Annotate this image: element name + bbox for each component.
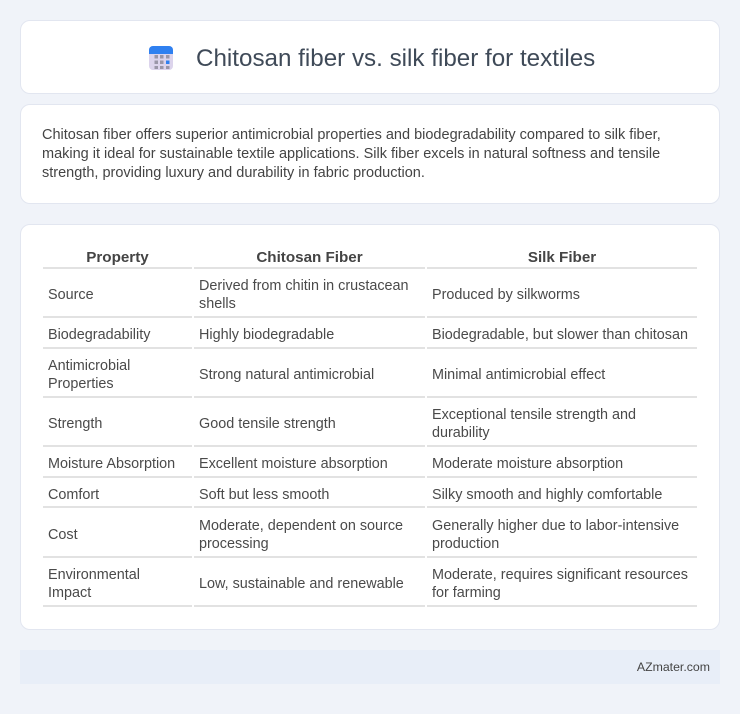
header: Chitosan Fiber: Chitosan Fiber — [256, 249, 363, 266]
comparison table: Good tensile strength — [199, 416, 336, 432]
comparison table: for farming — [432, 585, 501, 601]
row: Environmental Impact — [48, 567, 140, 601]
comparison table: Exceptional tensile strength and — [432, 407, 636, 423]
summary text: strength, providing luxury and durability in fabric production. — [42, 165, 425, 181]
footer credit: AZmater.com — [637, 660, 710, 674]
comparison table: Excellent moisture absorption — [199, 456, 388, 472]
table card — [20, 224, 720, 630]
comparison table: Produced by silkworms — [432, 287, 580, 303]
summary text: making it ideal for sustainable textile applications. Silk fiber excels in natural softness and tensile — [42, 146, 660, 162]
row: Strength: Strength — [48, 416, 102, 432]
comparison table: Moderate moisture absorption — [432, 456, 623, 472]
comparison table: Soft but less smooth — [199, 487, 329, 503]
summary text — [42, 127, 661, 181]
header: Silk Fiber: Silk Fiber — [528, 249, 596, 266]
comparison table: Moderate, dependent on source — [199, 518, 403, 534]
row: Environmental Impact: Impact — [48, 585, 91, 601]
header: Property: Property — [86, 249, 149, 266]
row: Cost: Cost — [48, 527, 78, 543]
comparison table: production — [432, 536, 499, 552]
comparison table: Minimal antimicrobial effect — [432, 367, 605, 383]
comparison table: Biodegradable, but slower than chitosan — [432, 327, 688, 343]
icon: calendar — [149, 46, 173, 70]
row: Moisture Absorption: Moisture Absorption — [48, 456, 175, 472]
row: Biodegradability: Biodegradability — [48, 327, 150, 343]
summary text: Chitosan fiber offers superior antimicrobial properties and biodegradability compared to silk fiber, — [42, 127, 661, 143]
row: Antimicrobial Properties: Properties — [48, 376, 114, 392]
comparison table: Moderate, requires significant resources — [432, 567, 688, 583]
comparison table: shells — [199, 296, 236, 312]
row: Environmental Impact: Environmental — [48, 567, 140, 583]
comparison table: durability — [432, 425, 490, 441]
title: Chitosan fiber vs. silk fiber for textiles — [196, 45, 595, 72]
comparison table: processing — [199, 536, 269, 552]
title card — [20, 20, 720, 94]
footer bar — [20, 650, 720, 684]
row: Source: Source — [48, 287, 94, 303]
comparison table: Strong natural antimicrobial — [199, 367, 374, 383]
comparison table: Generally higher due to labor-intensive — [432, 518, 679, 534]
summary card — [20, 104, 720, 204]
comparison table: Highly biodegradable — [199, 327, 334, 343]
comparison table: Derived from chitin in crustacean — [199, 278, 409, 294]
row: Comfort: Comfort — [48, 487, 99, 503]
comparison table: Low, sustainable and renewable — [199, 576, 404, 592]
row: Antimicrobial Properties: Antimicrobial — [48, 358, 130, 374]
row: Antimicrobial Properties — [48, 358, 130, 392]
comparison table: Silky smooth and highly comfortable — [432, 487, 662, 503]
